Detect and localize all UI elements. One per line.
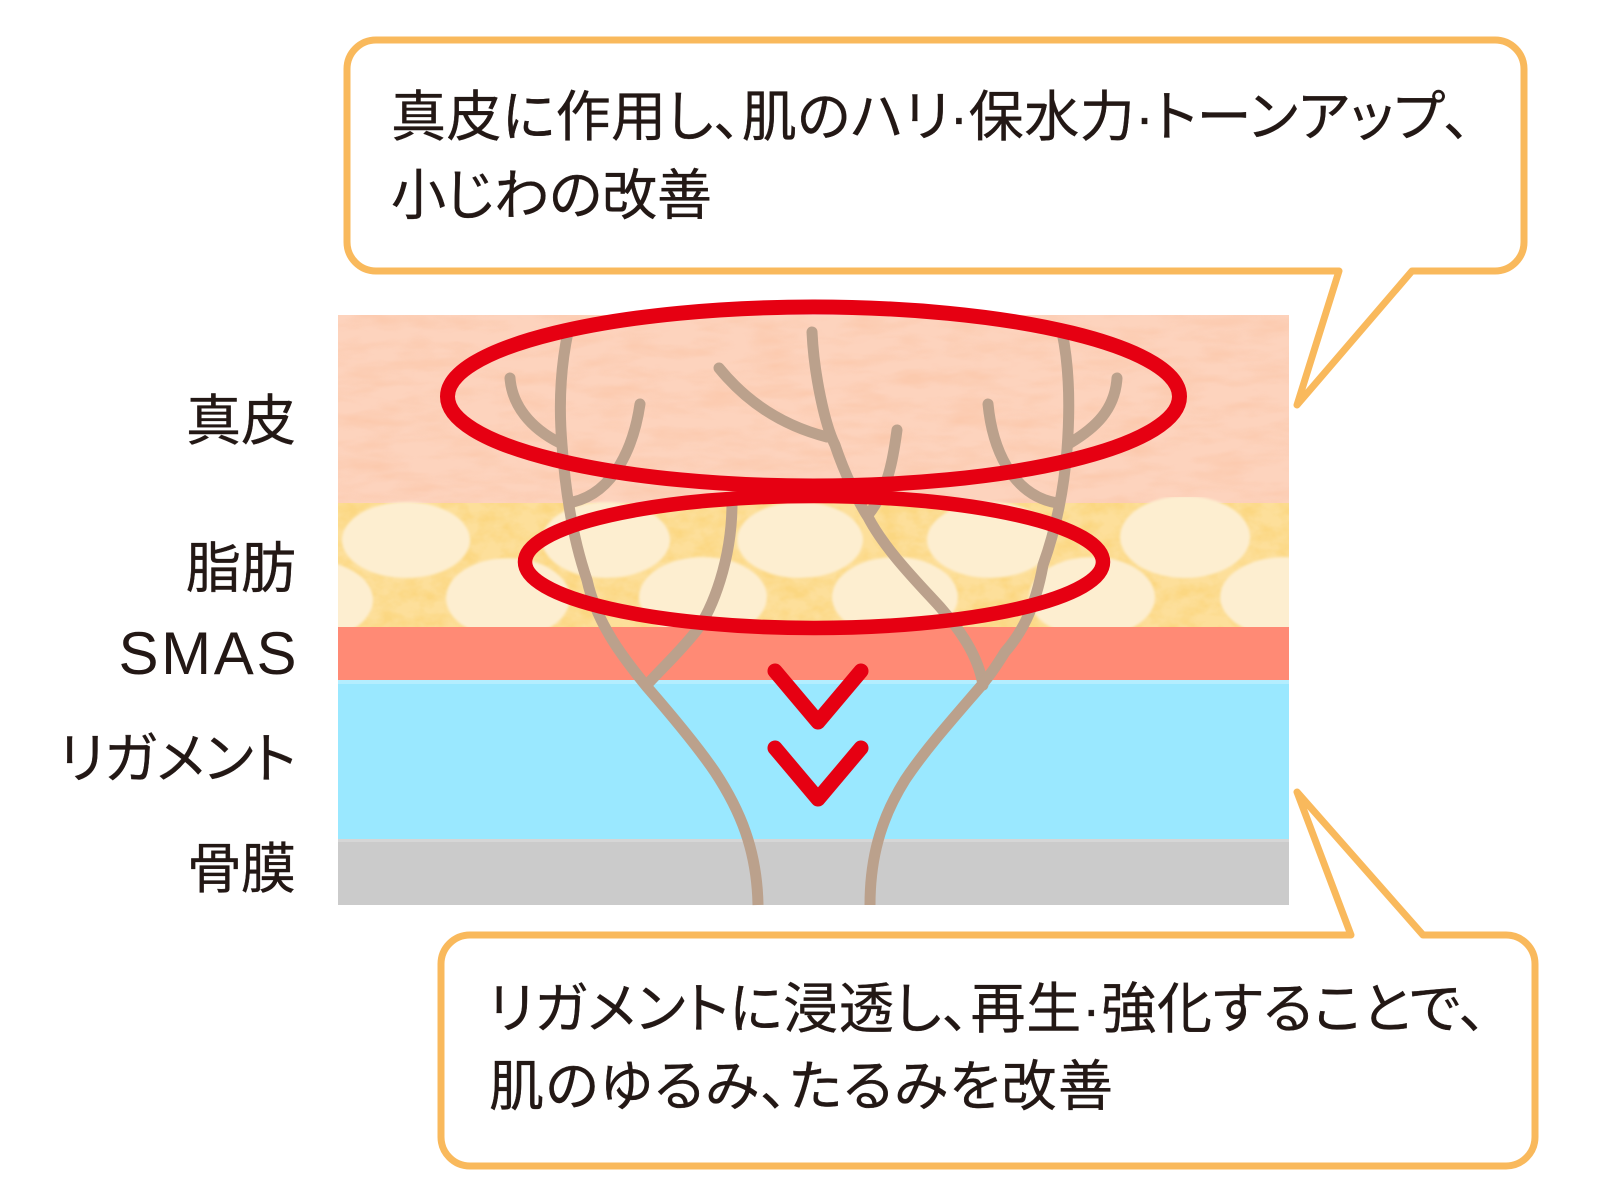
label: ligament: リガメント: [59, 728, 296, 790]
callout text: 小じわの改善: [391, 164, 712, 226]
illustration: ligament branching fibers: [510, 332, 1117, 905]
callout text: リガメントに浸透し、再生·強化することで、: [488, 978, 1486, 1040]
label: fat: 脂肪: [186, 538, 296, 600]
layer: ligament: [338, 680, 1289, 839]
callout text: [488, 978, 1486, 1118]
label: periosteum: 骨膜: [187, 838, 296, 900]
icon: downward chevrons: [775, 671, 861, 799]
layer: dermis: [338, 315, 1289, 505]
layer labels: [59, 390, 296, 900]
callout outline: [347, 40, 1524, 405]
callout text: 真皮に作用し、肌のハリ·保水力·トーンアップ、: [391, 86, 1471, 148]
panel: skin layer cross-section: [338, 315, 1289, 905]
label: SMAS: SMAS: [118, 620, 296, 687]
callout: dermis effect: [347, 40, 1524, 405]
callout: ligament effect: [441, 792, 1535, 1166]
layer: SMAS: [338, 627, 1289, 680]
layer: periosteum: [338, 839, 1289, 905]
callout text: [391, 86, 1471, 226]
layer: fat with fat cells: [338, 497, 1289, 627]
highlight ring: dermis: [448, 307, 1180, 486]
callout outline: [441, 792, 1535, 1166]
label: dermis: 真皮: [186, 390, 296, 452]
highlight ring: fat: [525, 496, 1103, 628]
callout text: 肌のゆるみ、たるみを改善: [489, 1056, 1113, 1118]
